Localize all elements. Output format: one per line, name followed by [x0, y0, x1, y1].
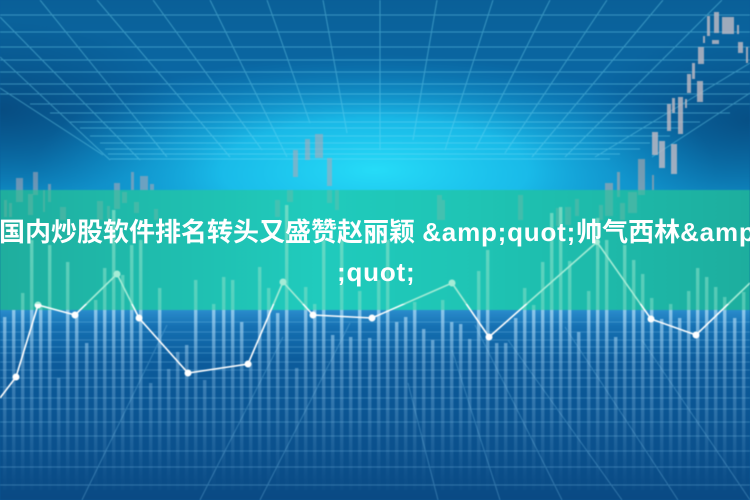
bar chart: [3, 205, 745, 490]
title: [0, 217, 750, 287]
line chart: [0, 239, 750, 398]
faint candlesticks behind band: [4, 190, 645, 226]
teal title band: [0, 190, 750, 310]
title: 国内炒股软件排名转头又盛赞赵丽颖 &amp;quot;帅气西林&amp: [0, 217, 750, 247]
sky background: [0, 0, 750, 190]
title: ;quot;: [337, 257, 415, 287]
candlesticks: [16, 134, 332, 209]
lower dark blue panel: [0, 310, 750, 500]
